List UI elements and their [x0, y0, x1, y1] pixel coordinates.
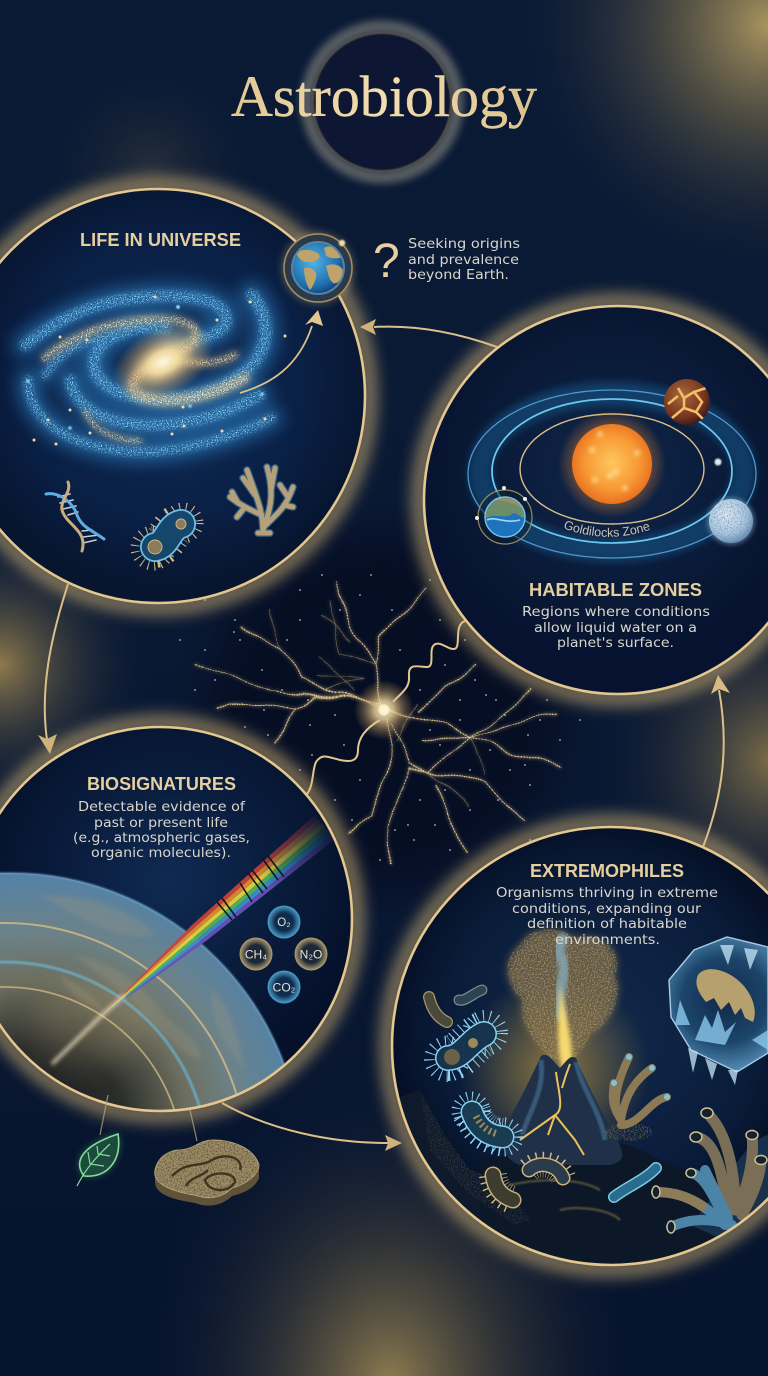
- volcano glow: [466, 994, 644, 1135]
- panel: life in universe: [0, 185, 369, 607]
- planet atmosphere: [0, 871, 286, 1110]
- heading: habitable zones: HABITABLE ZONES: [529, 580, 702, 600]
- sun: [558, 410, 666, 518]
- water planet: [477, 488, 532, 544]
- text block: habitable zones: Regions where conditions: [522, 604, 710, 620]
- molecule: co2: CO₂: [273, 980, 296, 994]
- label: goldilocks zone: Goldilocks Zone: [564, 521, 650, 537]
- microbe: blue ciliated two: [456, 1096, 519, 1152]
- text block: extremophiles: conditions, expanding our: [512, 901, 701, 917]
- molecule: co2: [268, 970, 300, 1004]
- panel: biosignatures: [0, 704, 375, 1134]
- panel: habitable zones: [401, 284, 768, 716]
- title: Astrobiology: [231, 64, 537, 129]
- icon: coral: [230, 467, 293, 533]
- arrow: habitable zones to life in universe: [360, 319, 497, 347]
- blue steam: [559, 935, 566, 1020]
- connector lines to leaf and stromatolite: [100, 1095, 197, 1141]
- rocky ground: [400, 1093, 480, 1220]
- microbe rods: [429, 990, 656, 1197]
- arrow: life in universe to biosignatures: [38, 584, 68, 754]
- ice block with tardigrade: [669, 937, 768, 1085]
- label: goldilocks zone: [564, 521, 650, 537]
- icon: stromatolite: [155, 1140, 259, 1206]
- text block: biosignatures: past or present life: [94, 815, 228, 831]
- arrow: galaxy to earth: [240, 310, 323, 393]
- volcano cone: [502, 1055, 622, 1165]
- text block: biosignatures: (e.g., atmospheric gases,: [73, 830, 250, 846]
- text block: seeking origins: and prevalence: [408, 252, 519, 268]
- smoke plume: [507, 929, 618, 1060]
- molecule: n2o: [294, 938, 328, 970]
- text block: habitable zones: planet's surface.: [557, 635, 674, 651]
- text block: seeking origins: beyond Earth.: [408, 267, 509, 283]
- text block: biosignatures: Detectable evidence of: [78, 799, 246, 815]
- molecule: ch4: [240, 938, 272, 970]
- wave connector: centre to habitable zones: [393, 621, 465, 702]
- molecule: ch4: CH₄: [245, 948, 267, 962]
- text block: habitable zones: [522, 604, 710, 651]
- heading: life in universe: LIFE IN UNIVERSE: [80, 230, 241, 250]
- rainbow spectrum beam: [52, 815, 335, 1064]
- text block: seeking origins: Seeking origins: [408, 236, 520, 252]
- molecule: o2: O₂: [277, 917, 291, 929]
- icon: microbe: [135, 507, 199, 566]
- text block: extremophiles: [496, 885, 718, 948]
- tube worm colony: [651, 1107, 768, 1236]
- icon: earth globe: [282, 232, 354, 304]
- text block: extremophiles: Organisms thriving in extreme: [496, 885, 718, 901]
- molecule: n2o: N₂O: [300, 948, 322, 962]
- panel: extremophiles: [380, 823, 768, 1290]
- lava flame: [558, 985, 572, 1072]
- orbit diagram: [468, 390, 756, 558]
- text block: habitable zones: allow liquid water on a: [534, 620, 697, 636]
- text block: extremophiles: definition of habitable: [527, 916, 687, 932]
- lava planet: [664, 379, 710, 425]
- wave connector: centre to biosignatures: [307, 720, 380, 794]
- arrow: extremophiles to habitable zones: [703, 675, 730, 847]
- ice planet: [707, 497, 755, 545]
- molecule: o2: [268, 906, 300, 938]
- title eclipse ring: [307, 27, 457, 177]
- small star: [714, 458, 722, 466]
- microbe: gold ciliated three: [529, 1165, 563, 1178]
- neural network centre: [180, 575, 580, 860]
- heading: biosignatures: BIOSIGNATURES: [87, 774, 236, 794]
- text block: extremophiles: environments.: [555, 932, 660, 948]
- text block: seeking origins: [408, 236, 520, 283]
- microbe: gold ciliated four: [493, 1175, 513, 1200]
- arrow: biosignatures to extremophiles: [222, 1103, 402, 1151]
- icon: green leaf: [77, 1134, 119, 1186]
- heading: extremophiles: EXTREMOPHILES: [530, 861, 684, 881]
- text block: biosignatures: [73, 799, 250, 861]
- stars: [180, 575, 580, 860]
- text block: biosignatures: organic molecules).: [91, 845, 231, 861]
- galaxy: [25, 295, 285, 452]
- question mark: ?: [373, 235, 400, 288]
- microbe: blue ciliated one: [430, 1016, 502, 1076]
- icon: dna helix: [46, 482, 104, 551]
- vent tube worms: [604, 1057, 667, 1141]
